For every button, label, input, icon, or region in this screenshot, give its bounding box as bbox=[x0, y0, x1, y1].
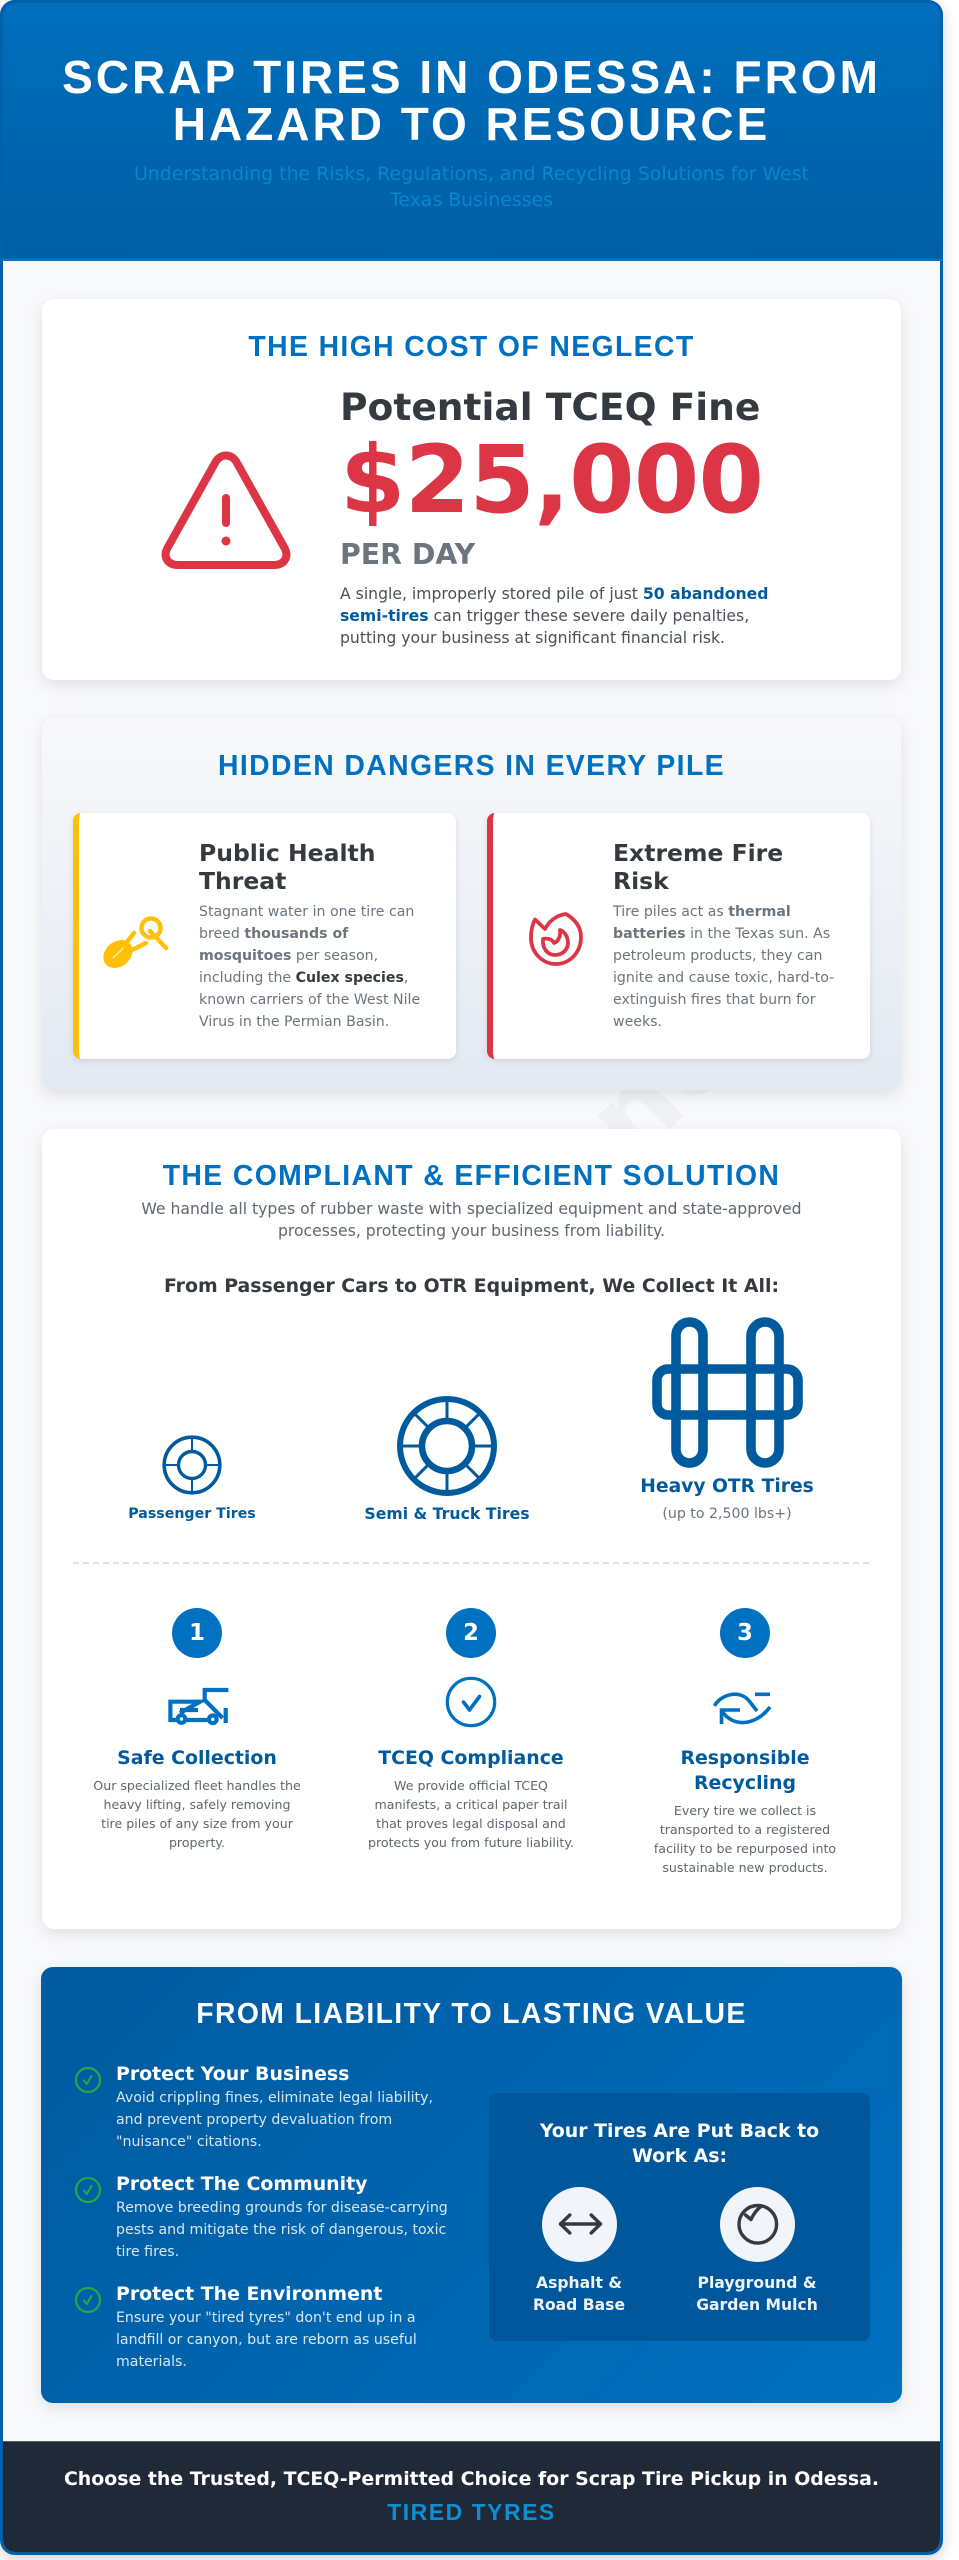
card: public health threat bbox=[73, 813, 456, 1059]
step 1 bbox=[93, 1608, 301, 1850]
product: mulch bbox=[696, 2187, 818, 2314]
heading bbox=[540, 2120, 819, 2166]
heading bbox=[680, 1746, 810, 1794]
number badge bbox=[720, 1608, 770, 1658]
text: Ensure your "tired tyres" don't end up in a bbox=[116, 2310, 415, 2326]
text: protects you from future liability. bbox=[368, 1835, 574, 1850]
text: property. bbox=[169, 1835, 225, 1850]
text: We provide official TCEQ bbox=[394, 1778, 548, 1793]
icon: flame bbox=[529, 912, 583, 966]
text: Avoid crippling fines, eliminate legal liability, bbox=[116, 2090, 433, 2106]
text: Our specialized fleet handles the bbox=[93, 1778, 301, 1793]
text: sustainable new products. bbox=[662, 1860, 828, 1875]
text: "nuisance" citations. bbox=[116, 2134, 262, 2150]
icon: medium tire bbox=[397, 1396, 497, 1496]
heading: Protect The Community bbox=[116, 2173, 367, 2195]
text: weeks. bbox=[613, 1014, 662, 1030]
subheading: From Passenger Cars to OTR Equipment, We Collect It All: bbox=[164, 1274, 779, 1296]
text: manifests, a critical paper trail bbox=[374, 1797, 568, 1812]
intro text: processes, protecting your business from liability. bbox=[278, 1221, 665, 1240]
text bbox=[368, 1778, 574, 1850]
subtitle: Texas Businesses bbox=[390, 188, 553, 210]
intro text: We handle all types of rubber waste with specialized equipment and state-approved bbox=[141, 1199, 802, 1218]
description: A single, improperly stored pile of just 50 abandoned bbox=[340, 584, 768, 603]
icon: check bbox=[74, 2066, 102, 2094]
number badge bbox=[446, 1608, 496, 1658]
text: Tire piles act as thermal bbox=[613, 904, 791, 920]
text: tire fires. bbox=[116, 2244, 179, 2260]
label: Passenger Tires bbox=[128, 1506, 256, 1522]
number badge: 2 bbox=[463, 1620, 479, 1646]
heading: THE HIGH COST OF NEGLECT bbox=[248, 331, 695, 363]
label: Heavy OTR Tires bbox=[640, 1476, 814, 1497]
text: pests and mitigate the risk of dangerous, toxic bbox=[116, 2222, 446, 2238]
subtitle: Understanding the Risks, Regulations, and Recycling Solutions for West bbox=[134, 162, 809, 184]
text: known carriers of the West Nile bbox=[199, 992, 420, 1008]
heading: Public Health bbox=[199, 838, 375, 866]
text: Remove breeding grounds for disease-carrying bbox=[116, 2200, 448, 2216]
icon: mosquito bbox=[103, 916, 168, 968]
icon: truck bbox=[168, 1688, 228, 1726]
label: Semi & Truck Tires bbox=[364, 1504, 530, 1522]
tire: semi and truck bbox=[364, 1396, 530, 1522]
heading: FROM LIABILITY TO LASTING VALUE bbox=[196, 1998, 747, 2030]
label: Road Base bbox=[533, 2296, 625, 2314]
tire: passenger bbox=[128, 1435, 256, 1522]
title: SCRAP TIRES IN ODESSA: FROM bbox=[62, 51, 881, 103]
text bbox=[199, 904, 420, 1030]
description: putting your business at significant financial risk. bbox=[340, 628, 725, 647]
benefit: business bbox=[74, 2063, 433, 2150]
text: ignite and cause toxic, hard-to- bbox=[613, 970, 834, 986]
panel: hidden dangers bbox=[42, 718, 901, 1090]
text bbox=[93, 1778, 301, 1850]
benefit: community bbox=[74, 2173, 448, 2260]
text bbox=[116, 2310, 417, 2370]
text: tire piles of any size from your bbox=[101, 1816, 293, 1831]
title bbox=[62, 51, 881, 150]
icon: warning triangle bbox=[162, 452, 290, 569]
number badge: 3 bbox=[737, 1620, 753, 1646]
description: semi-tires can trigger these severe daily penalties, bbox=[340, 606, 749, 625]
label: Playground & bbox=[698, 2274, 816, 2292]
per day: PER DAY bbox=[340, 538, 475, 570]
header bbox=[0, 0, 943, 261]
step 2 bbox=[368, 1608, 574, 1850]
fine label: Potential TCEQ Fine bbox=[340, 384, 760, 428]
heading: THE COMPLIANT & EFFICIENT SOLUTION bbox=[163, 1160, 780, 1192]
heading: Extreme Fire bbox=[613, 838, 783, 866]
text: facility to be repurposed into bbox=[654, 1841, 836, 1856]
fine amount: $25,000 bbox=[340, 426, 763, 535]
text: heavy lifting, safely removing bbox=[104, 1797, 290, 1812]
heading: Work As: bbox=[632, 2144, 727, 2166]
heading bbox=[199, 838, 375, 895]
text: that proves legal disposal and bbox=[376, 1816, 566, 1831]
icon: OTR tire bbox=[652, 1317, 803, 1468]
product: asphalt bbox=[533, 2187, 625, 2314]
text: including the Culex species, bbox=[199, 970, 408, 986]
footer bbox=[3, 2441, 940, 2552]
heading: Recycling bbox=[694, 1772, 796, 1794]
step 3 bbox=[654, 1608, 836, 1875]
panel: lasting value bbox=[41, 1967, 902, 2403]
icon: check circle bbox=[446, 1676, 496, 1728]
icon: check bbox=[74, 2176, 102, 2204]
heading bbox=[613, 838, 783, 895]
text bbox=[612, 904, 834, 1030]
text: transported to a registered bbox=[660, 1822, 830, 1837]
text bbox=[116, 2090, 433, 2150]
text: Virus in the Permian Basin. bbox=[199, 1014, 389, 1030]
number badge: 1 bbox=[189, 1620, 205, 1646]
watermark fragment: ne bbox=[562, 985, 760, 1183]
label bbox=[533, 2274, 625, 2314]
icon: ball bbox=[720, 2187, 794, 2262]
benefit: environment bbox=[74, 2283, 417, 2370]
description bbox=[340, 584, 768, 647]
heading: Safe Collection bbox=[117, 1746, 277, 1768]
heading: Responsible bbox=[680, 1746, 810, 1768]
text: mosquitoes per season, bbox=[199, 948, 378, 964]
text bbox=[654, 1803, 836, 1875]
icon: check bbox=[74, 2286, 102, 2314]
subtitle bbox=[134, 162, 809, 210]
text: extinguish fires that burn for bbox=[613, 992, 816, 1008]
heading: Protect Your Business bbox=[116, 2063, 349, 2085]
icon: small tire bbox=[162, 1435, 222, 1495]
icon: recycle arrows bbox=[712, 1692, 772, 1724]
heading: Threat bbox=[199, 867, 286, 895]
heading: Risk bbox=[613, 867, 669, 895]
brand name: TIRED TYRES bbox=[387, 2499, 556, 2525]
panel: reuse products bbox=[489, 2093, 870, 2341]
heading: Your Tires Are Put Back to bbox=[540, 2120, 819, 2142]
text: Every tire we collect is bbox=[674, 1803, 816, 1818]
card: extreme fire risk bbox=[487, 813, 870, 1059]
number badge bbox=[172, 1608, 222, 1658]
panel: high cost of neglect bbox=[42, 299, 901, 680]
text: petroleum products, they can bbox=[613, 948, 822, 964]
title: HAZARD TO RESOURCE bbox=[173, 98, 770, 150]
text: materials. bbox=[116, 2354, 187, 2370]
heading: Protect The Environment bbox=[116, 2283, 382, 2305]
label: Asphalt & bbox=[536, 2274, 622, 2292]
call to action: Choose the Trusted, TCEQ-Permitted Choice for Scrap Tire Pickup in Odessa. bbox=[64, 2468, 879, 2490]
text: breed thousands of bbox=[199, 926, 348, 942]
intro text bbox=[141, 1199, 802, 1240]
label: Garden Mulch bbox=[696, 2296, 818, 2314]
text: Stagnant water in one tire can bbox=[199, 904, 414, 920]
text: batteries in the Texas sun. As bbox=[613, 926, 830, 942]
heading: HIDDEN DANGERS IN EVERY PILE bbox=[218, 750, 725, 782]
tire: heavy OTR bbox=[640, 1317, 814, 1522]
weight note: (up to 2,500 lbs+) bbox=[662, 1506, 792, 1522]
label bbox=[687, 2272, 827, 2316]
text bbox=[116, 2200, 448, 2260]
text: and prevent property devaluation from bbox=[116, 2112, 392, 2128]
heading: TCEQ Compliance bbox=[378, 1746, 564, 1768]
text: landfill or canyon, but are reborn as useful bbox=[116, 2332, 417, 2348]
icon: two-way arrow bbox=[542, 2187, 616, 2262]
panel: compliant solution bbox=[42, 1129, 901, 1929]
